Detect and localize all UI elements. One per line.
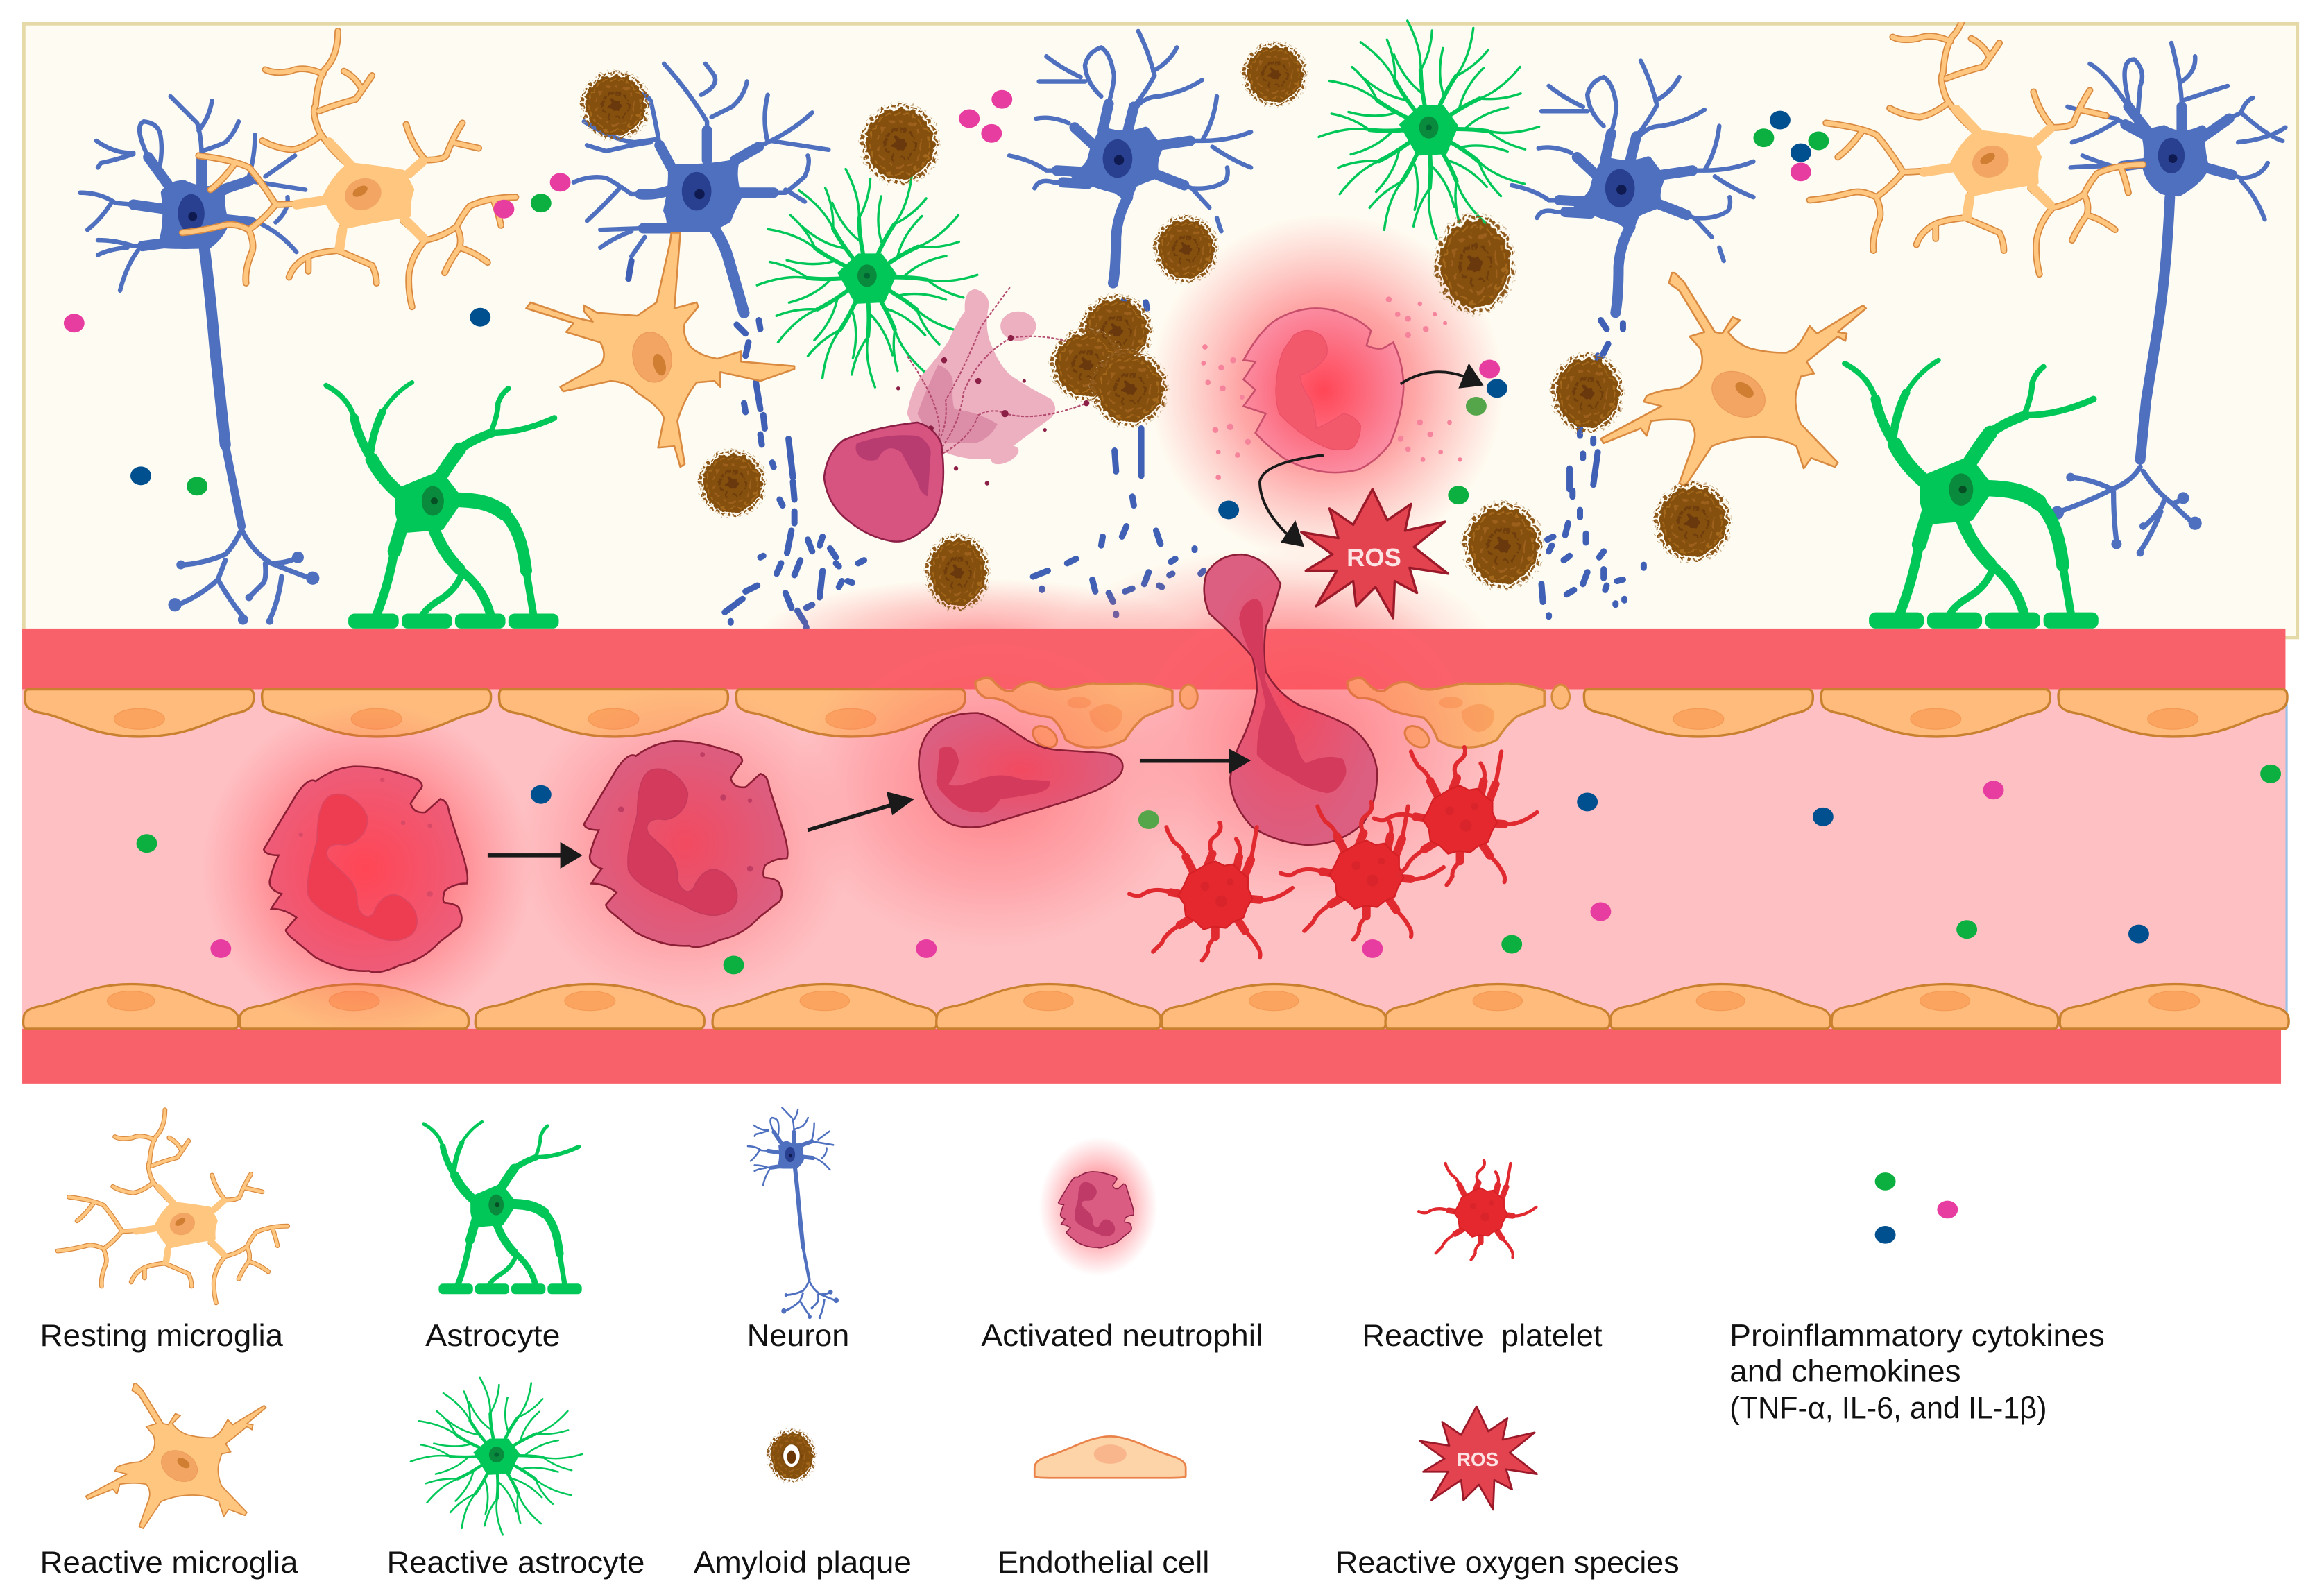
glow: transmigrating neutrophil	[1111, 578, 1497, 904]
glow: transmigrating neutrophil upper	[1052, 549, 1497, 756]
legend icon: amyloid plaque	[767, 1428, 817, 1483]
reactive astrocyte 2	[1318, 19, 1541, 239]
legend icon: activated neutrophil	[1039, 1137, 1158, 1277]
legend icon: reactive microglia	[85, 1383, 266, 1528]
transmigrating neutrophil	[1204, 554, 1377, 845]
panel: brain parenchyma background	[24, 24, 2298, 638]
adhering neutrophil	[919, 713, 1122, 828]
neuron: healthy left	[80, 96, 319, 625]
glow: adhering neutrophil	[793, 622, 1193, 948]
damaged endothelial cell 1	[975, 678, 1197, 751]
legend label: activated neutrophil: Activated neutrophil	[981, 1317, 1263, 1353]
axon fragments 1	[629, 261, 864, 629]
top endothelial cells	[25, 690, 2287, 737]
ROS-releasing neutrophil	[1201, 296, 1462, 480]
glow: wall upper	[756, 578, 1201, 697]
axon fragments 3	[1541, 321, 1643, 617]
ROS starburst: ROS	[1347, 543, 1401, 572]
degenerating neuron 3	[1512, 61, 1753, 313]
amyloid plaques	[580, 42, 1732, 611]
cytokine dots	[64, 90, 2281, 974]
arrow: neutrophil 2 to adhering	[808, 792, 914, 830]
legend icon: reactive platelet	[1419, 1160, 1536, 1259]
reactive microglia left	[526, 232, 794, 467]
legend label: reactive oxygen species: Reactive oxygen species	[1335, 1544, 1680, 1580]
axon fragments 2	[1033, 301, 1204, 615]
legend label: reactive astrocyte: Reactive astrocyte	[387, 1544, 644, 1580]
legend icon: astrocyte	[424, 1122, 582, 1294]
reactive astrocyte 1	[756, 167, 979, 388]
glow: ROS neutrophil	[1149, 214, 1505, 563]
endothelial wall: bottom basement membrane	[22, 1029, 2281, 1084]
degenerating neuron 2	[1009, 31, 1251, 283]
degenerating neuron 1	[574, 64, 828, 313]
legend label: amyloid plaque: Amyloid plaque	[694, 1544, 912, 1580]
ROS starburst	[1301, 489, 1448, 618]
legend icon: cytokines	[1875, 1172, 1958, 1244]
legend label: cytokines: (TNF-α, IL-6, and IL-1β)	[1729, 1390, 2047, 1426]
legend label: neuron: Neuron	[747, 1317, 849, 1353]
legend icon: ROS	[1419, 1406, 1537, 1510]
vessel lumen	[22, 690, 2285, 1029]
arrow: ROS neutrophil to cytokines	[1401, 363, 1484, 389]
legend label: reactive microglia: Reactive microglia	[40, 1544, 298, 1580]
arrow: adhering to transmigrating	[1140, 749, 1251, 774]
legend icon: neuron	[748, 1107, 839, 1319]
endothelial wall: top basement membrane	[22, 629, 2285, 690]
resting microglia right	[1810, 0, 2143, 274]
reactive microglia right	[1600, 273, 1866, 486]
bottom endothelial cells	[24, 984, 2289, 1029]
legend label: resting microglia: Resting microglia	[40, 1317, 283, 1353]
legend label: cytokines	[1729, 1317, 2105, 1426]
resting microglia left	[182, 31, 515, 307]
astrocyte right	[1845, 360, 2099, 629]
legend label: endothelial cell: Endothelial cell	[998, 1544, 1209, 1580]
damaged endothelial cell 2	[1347, 678, 1570, 751]
legend icon: resting microglia	[58, 1110, 288, 1303]
legend icon: reactive astrocyte	[410, 1376, 583, 1535]
glow: neutrophil 2	[519, 685, 851, 1005]
legend label: cytokines: Proinflammatory cytokines	[1729, 1317, 2105, 1353]
astrocyte left	[326, 382, 558, 629]
legend label: astrocyte: Astrocyte	[425, 1317, 561, 1353]
NET cloud and phagocyte neutrophil	[824, 286, 1089, 542]
neutrophil 1	[264, 767, 468, 972]
neuron: right	[2051, 43, 2285, 556]
legend icon: ROS: ROS	[1457, 1449, 1498, 1470]
neutrophil 2	[584, 741, 787, 947]
legend icon: endothelial cell	[1034, 1436, 1186, 1478]
legend label: reactive platelet: Reactive platelet	[1362, 1317, 1603, 1353]
glow: neutrophil 1	[202, 703, 533, 1034]
arrow: neutrophil 1 to 2	[488, 842, 583, 869]
platelets	[1129, 747, 1537, 961]
arrow: ROS neutrophil to ROS	[1260, 455, 1324, 547]
legend label: cytokines: and chemokines	[1729, 1353, 1961, 1388]
